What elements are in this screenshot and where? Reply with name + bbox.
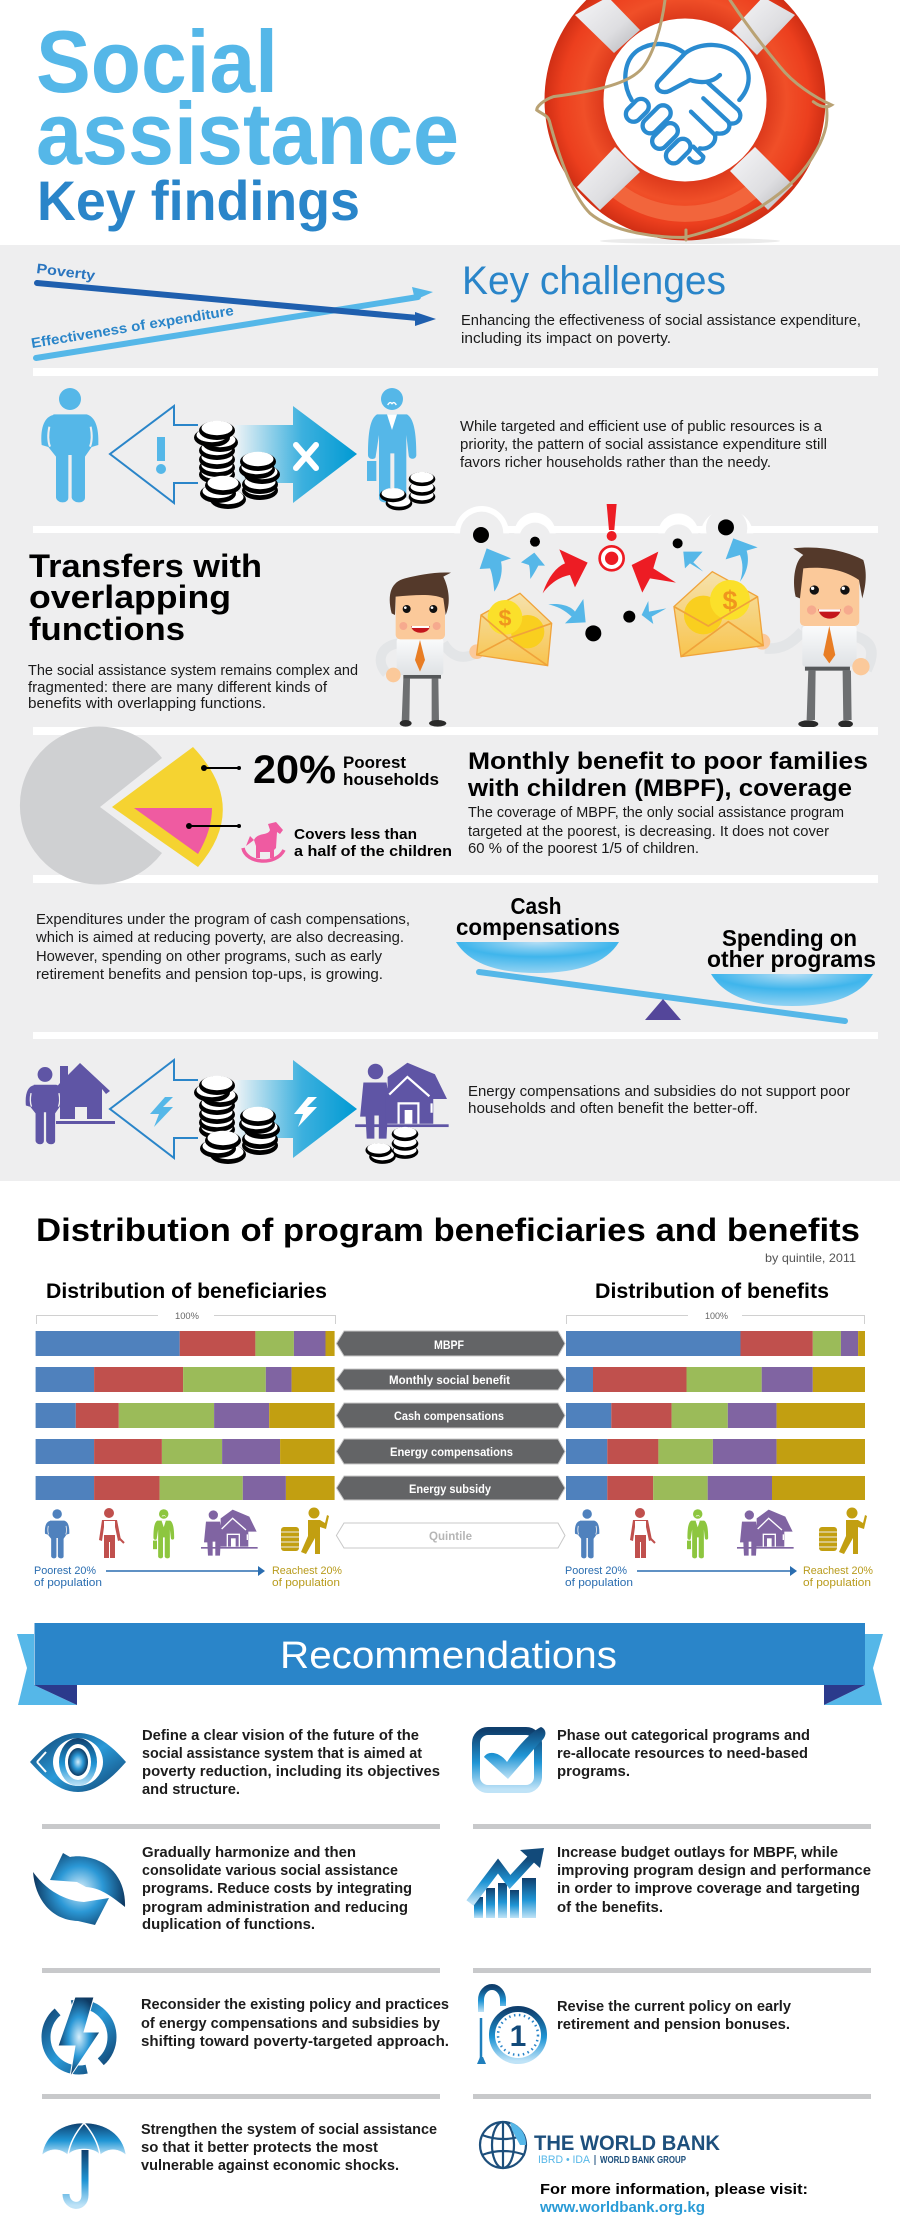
labels: program names: Monthly social benefit (389, 1373, 510, 1387)
text: recommendation 6: retirement and pension bonuses. (557, 2017, 790, 2033)
chart: balance scale: other programs (707, 946, 876, 972)
heading: key challenges: Key challenges (462, 259, 726, 303)
chart: beneficiaries stacked bars (36, 1331, 335, 1500)
text: recommendation 6 (557, 1999, 791, 2033)
icon: rich person (367, 388, 435, 510)
text: recommendation 7: so that it better protects the most (141, 2140, 378, 2156)
text: MBPF body: 60 % of the poorest 1/5 of children. (468, 840, 699, 857)
label: quintile (336, 1523, 565, 1548)
text: recommendation 3: programs. Reduce costs by integrating (142, 1881, 412, 1897)
icon: cane and clock (477, 1987, 544, 2064)
chart: benefits stacked bars (566, 1331, 865, 1500)
bracket: 100 percent left: 100% (175, 1311, 199, 1321)
illustration: right man with envelope: $ (723, 585, 738, 615)
text: MBPF body: targeted at the poorest, is decreasing. It does not cover (468, 823, 829, 840)
icon: exclamation and target with arrows (480, 504, 758, 624)
text: recommendation 7: vulnerable against economic shocks. (141, 2158, 399, 2174)
text: covers less than half: a half of the children (294, 843, 452, 860)
heading: distribution: by quintile, 2011 (765, 1251, 856, 1265)
text: recommendation 4: improving program design and performance (557, 1863, 871, 1879)
icons: quintile people left (45, 1508, 329, 1558)
chart: balance scale: compensations (456, 914, 620, 940)
icon: eye (30, 1733, 126, 1792)
icon: circular arrows (33, 1853, 125, 1925)
text: recommendation 1: and structure. (142, 1782, 240, 1798)
title: assistance (36, 84, 459, 183)
arrow: energy outflow (110, 1060, 198, 1158)
text: recommendation 3: Gradually harmonize and then (142, 1845, 356, 1861)
icons: quintile people right (575, 1508, 867, 1558)
heading: distribution of beneficiaries: Distribution of beneficiaries (46, 1280, 327, 1303)
icon: rocking horse (243, 822, 284, 861)
stat: 20 percent poorest households: Poorest (343, 754, 407, 772)
text: transfers body (28, 662, 358, 712)
heading: MBPF coverage: with children (MBPF), coverage (467, 775, 852, 802)
bracket: 100 percent right: 100% (705, 1311, 728, 1321)
legend: poorest to richest right: Poorest 20% (565, 1565, 627, 1577)
text: cash compensations body: Expenditures under the program of cash compensations, (36, 911, 410, 928)
text: recommendation 2: programs. (557, 1764, 630, 1780)
title: Social (36, 12, 278, 111)
illustration: right man with envelope (674, 547, 871, 728)
text: key challenges body: Enhancing the effectiveness of social assistance expenditure, (461, 312, 861, 329)
text: recommendation 6: Revise the current policy on early (557, 1999, 791, 2015)
logo: world bank (480, 2122, 720, 2168)
text: recommendation 1: poverty reduction, including its objectives (142, 1764, 440, 1780)
logo: world bank: THE WORLD BANK (534, 2132, 720, 2155)
text: recommendation 2 (557, 1728, 810, 1780)
text: cash compensations body (35, 911, 410, 983)
legend: poorest to richest left: of population (272, 1577, 340, 1589)
text: targeting (460, 418, 827, 471)
text: recommendation 7 (141, 2122, 437, 2174)
legend: poorest to richest left: Poorest 20% (34, 1565, 96, 1577)
icon: poor man and small house (26, 1063, 115, 1144)
icon: coin stacks (194, 421, 280, 509)
text: recommendation 1: social assistance system that is aimed at (142, 1746, 422, 1762)
text: transfers body: The social assistance system remains complex and (28, 662, 358, 679)
text: recommendation 3 (142, 1845, 412, 1933)
text: recommendation 4: Increase budget outlays for MBPF, while (557, 1845, 838, 1861)
icon: lightning bolt in ring (46, 1997, 112, 2077)
text: recommendation 3: duplication of functions. (142, 1917, 315, 1933)
text: MBPF body: The coverage of MBPF, the only social assistance program (468, 804, 844, 821)
text: covers less than half: Covers less than (294, 826, 417, 843)
stat: 20 percent poorest households (253, 748, 439, 792)
legend: poorest to richest left: Reachest 20% (272, 1565, 342, 1577)
text: recommendation 4: in order to improve coverage and targeting (557, 1881, 860, 1897)
text: recommendation 3: program administration and reducing (142, 1900, 408, 1916)
heading: distribution (36, 1212, 860, 1265)
text: recommendation 4 (557, 1845, 871, 1916)
legend: poorest to richest left: of population (34, 1577, 102, 1589)
text: transfers body: benefits with overlapping functions. (28, 695, 266, 712)
legend: poorest to richest right: Reachest 20% (803, 1565, 873, 1577)
chart: balance scale: Spending on (722, 925, 857, 951)
labels: program names (336, 1331, 565, 1500)
legend: poorest to richest right: of population (565, 1577, 633, 1589)
heading: transfers with overlapping functions: Transfers with (29, 548, 262, 584)
text: cash compensations body: retirement benefits and pension top-ups, is growing. (36, 966, 383, 983)
chart: balance scale (456, 893, 876, 1021)
arrow: inflow to rich (235, 406, 357, 503)
labels: program names: Energy compensations (390, 1445, 513, 1459)
text: recommendation 5: of energy compensations and subsidies by (141, 2016, 440, 2032)
title (36, 12, 459, 232)
stat: 20 percent poorest households: 20% (253, 748, 336, 792)
text: energy compensations: Energy compensations and subsidies do not support poor (468, 1083, 850, 1100)
icon: growth chart (470, 1848, 544, 1918)
logo: world bank: WORLD BANK GROUP (600, 2155, 686, 2166)
text: more information: www.worldbank.org.kg (539, 2199, 705, 2216)
text: recommendation 5 (141, 1997, 449, 2050)
icon: umbrella (42, 2123, 126, 2205)
heading: distribution of benefits: Distribution of benefits (595, 1280, 829, 1303)
text: recommendation 5: shifting toward poverty-targeted approach. (141, 2034, 449, 2050)
text: recommendation 7: Strengthen the system of social assistance (141, 2122, 437, 2138)
text: covers less than half (294, 826, 452, 860)
chart: balance scale: Cash (510, 893, 562, 919)
heading: transfers with overlapping functions: functions (29, 611, 185, 647)
text: more information (539, 2181, 808, 2216)
bracket: 100 percent right (566, 1311, 864, 1324)
icon: lifebuoy with handshake (537, 0, 832, 244)
header background (0, 0, 900, 245)
text: cash compensations body: However, spending on other programs, such as early (36, 948, 382, 965)
illustration: left man with envelope (381, 572, 552, 727)
labels: program names: Cash compensations (394, 1409, 504, 1423)
labels: program names: Energy subsidy (409, 1482, 491, 1496)
logo: world bank: IBRD • IDA (538, 2154, 591, 2166)
icon: checkmark (476, 1727, 545, 1789)
stat: 20 percent poorest households: households (343, 771, 439, 789)
chart: poverty vs effectiveness arrows: Effectiveness of expenditure (30, 302, 235, 351)
icon: rich man with big house (355, 1063, 449, 1164)
heading: MBPF coverage: Monthly benefit to poor families (468, 748, 868, 775)
title: Key findings (37, 169, 360, 232)
text: recommendation 4: of the benefits. (557, 1900, 663, 1916)
heading: MBPF coverage (467, 748, 868, 802)
arrow: outflow to poor (110, 406, 198, 503)
label: quintile: Quintile (429, 1529, 472, 1543)
illustration: arcs and dots (454, 506, 753, 641)
text: recommendation 3: consolidate various social assistance (142, 1863, 398, 1879)
chart: coverage pie (20, 727, 241, 885)
illustration: left man with envelope: $ (498, 605, 511, 631)
text: recommendation 2: re-allocate resources to need-based (557, 1746, 808, 1762)
text: recommendation 2: Phase out categorical programs and (557, 1728, 810, 1744)
text: key challenges body: including its impact on poverty. (461, 330, 671, 347)
text: transfers body: fragmented: there are many different kinds of (28, 679, 328, 696)
arrow: energy inflow (235, 1060, 357, 1158)
text: energy compensations: households and often benefit the better-off. (468, 1100, 758, 1117)
legend: poorest to richest right: of population (803, 1577, 871, 1589)
legend: poorest to richest right (565, 1565, 873, 1589)
text: recommendation 5: Reconsider the existing policy and practices (141, 1997, 449, 2013)
text: recommendation 1: Define a clear vision of the future of the (142, 1728, 419, 1744)
text: energy compensations (468, 1083, 850, 1117)
labels: program names: MBPF (434, 1338, 464, 1352)
heading: transfers with overlapping functions (29, 548, 262, 647)
text: MBPF body (468, 804, 844, 857)
text: targeting: While targeted and efficient use of public resources is a (460, 418, 823, 435)
chart: poverty vs effectiveness arrows: Poverty (36, 260, 96, 283)
text: cash compensations body: which is aimed at reducing poverty, are also decreasing. (35, 929, 404, 946)
text: key challenges body (461, 312, 861, 347)
icon: cane and clock: 1 (510, 2020, 526, 2053)
grey panel background (0, 245, 900, 1181)
text: more information: For more information, please visit: (540, 2181, 808, 2198)
banner: recommendations: Recommendations (280, 1635, 617, 1677)
text: targeting: priority, the pattern of social assistance expenditure still (460, 436, 827, 453)
icon: poor person (41, 388, 98, 502)
icon: coin stacks energy (194, 1076, 280, 1164)
text: recommendation 1 (142, 1728, 440, 1798)
heading: transfers with overlapping functions: overlapping (29, 579, 231, 615)
text: targeting: favors richer households rather than the needy. (460, 454, 771, 471)
bracket: 100 percent left (36, 1311, 336, 1324)
legend: poorest to richest left (34, 1565, 342, 1589)
heading: distribution: Distribution of program beneficiaries and benefits (36, 1212, 860, 1248)
chart: poverty vs effectiveness arrows (30, 260, 436, 358)
banner: recommendations (17, 1623, 883, 1705)
